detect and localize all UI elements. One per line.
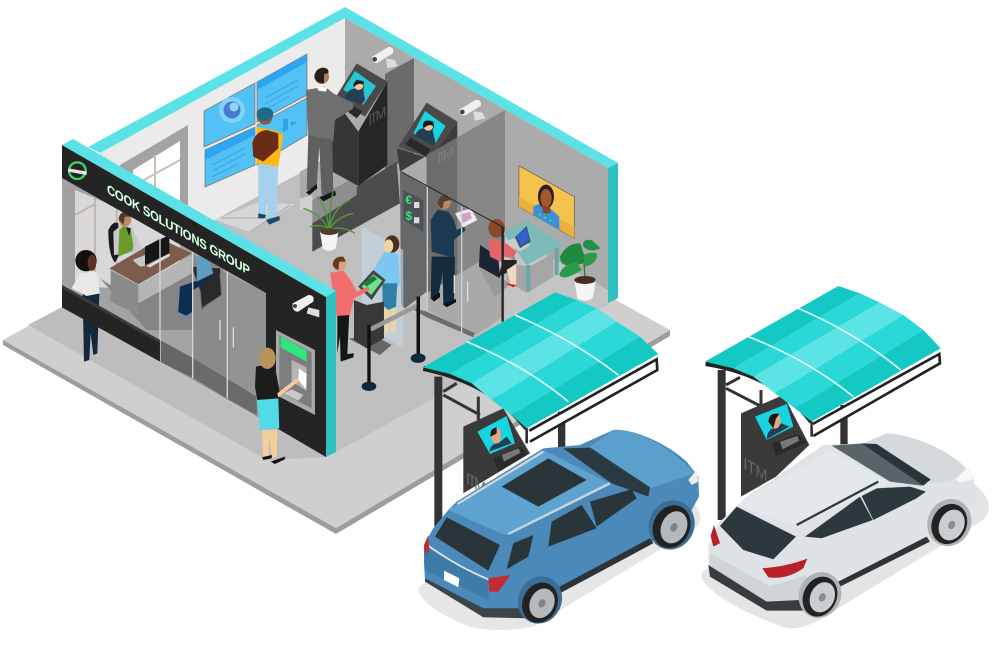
right room <box>400 110 601 337</box>
floor slab <box>3 100 670 534</box>
brand logo <box>68 162 87 179</box>
seated customer <box>177 255 222 317</box>
ITM kiosk 1 <box>329 63 387 186</box>
drive-through ITM <box>741 395 809 497</box>
low black band <box>62 285 160 362</box>
wall screens <box>204 54 307 187</box>
partition and pillar behind doors: ITM <box>437 142 454 169</box>
camera 2 <box>459 99 485 121</box>
left interior section <box>329 47 485 186</box>
silver SUV <box>701 433 989 628</box>
suited man at kiosk <box>306 68 353 201</box>
sign text: COOK SOLUTIONS GROUP <box>107 181 250 279</box>
reception back wall and window <box>64 190 180 290</box>
ATM and camera on the wall <box>255 295 319 464</box>
glass doors <box>401 172 504 333</box>
woman with dark hair <box>72 250 100 362</box>
backpack visitor <box>252 107 283 225</box>
rear rail <box>423 359 657 442</box>
floor rug <box>215 203 295 232</box>
canopy posts <box>722 370 844 520</box>
glass screen and receptionist <box>362 227 403 348</box>
partition and pillar behind doors: € <box>405 193 412 207</box>
woman at desk <box>479 219 517 297</box>
back right wall <box>345 18 608 355</box>
window <box>120 125 188 245</box>
car body <box>708 433 979 625</box>
receptionist <box>108 212 142 263</box>
door panels <box>160 255 267 422</box>
roof edge <box>88 7 618 303</box>
car body <box>424 430 703 631</box>
partition and pillar behind doors: $ <box>405 209 412 223</box>
video conference display <box>519 166 574 238</box>
partition <box>385 58 414 170</box>
reception desk <box>109 235 192 315</box>
drive-through ITM <box>463 408 530 499</box>
partition and pillar behind doors <box>400 110 505 337</box>
woman at ATM <box>255 348 298 464</box>
wheels <box>796 498 974 622</box>
drive-through ITM: ITM <box>466 468 486 499</box>
front wall <box>62 139 336 457</box>
kiosk alcove floor <box>300 157 400 252</box>
camera 1 <box>372 47 397 68</box>
canopy roof <box>423 292 658 428</box>
rear rail <box>706 354 940 436</box>
drive-through ITM: ITM <box>743 453 768 486</box>
suited customer with tablet <box>431 195 477 307</box>
canopy roof <box>705 286 941 422</box>
blue SUV <box>418 430 703 631</box>
man in pink shirt <box>330 257 370 362</box>
back left wall <box>100 18 345 275</box>
drive-through canopy 2 <box>705 286 941 520</box>
canopy posts <box>438 377 562 527</box>
reception floor <box>100 253 223 330</box>
queue area <box>330 227 426 391</box>
glass desk <box>503 220 563 293</box>
third stanchion <box>411 297 425 363</box>
ITM kiosk 1: ITM <box>368 104 386 130</box>
glass lines <box>160 217 227 398</box>
stanchions and belt <box>362 297 426 391</box>
ITM kiosk 2 <box>397 103 457 172</box>
reception area <box>62 139 336 464</box>
kiosk stand <box>348 270 392 355</box>
plant 2 <box>559 240 601 301</box>
plant 1 <box>303 190 355 251</box>
wheels <box>516 499 698 629</box>
drive-through canopy 1 <box>423 292 658 527</box>
